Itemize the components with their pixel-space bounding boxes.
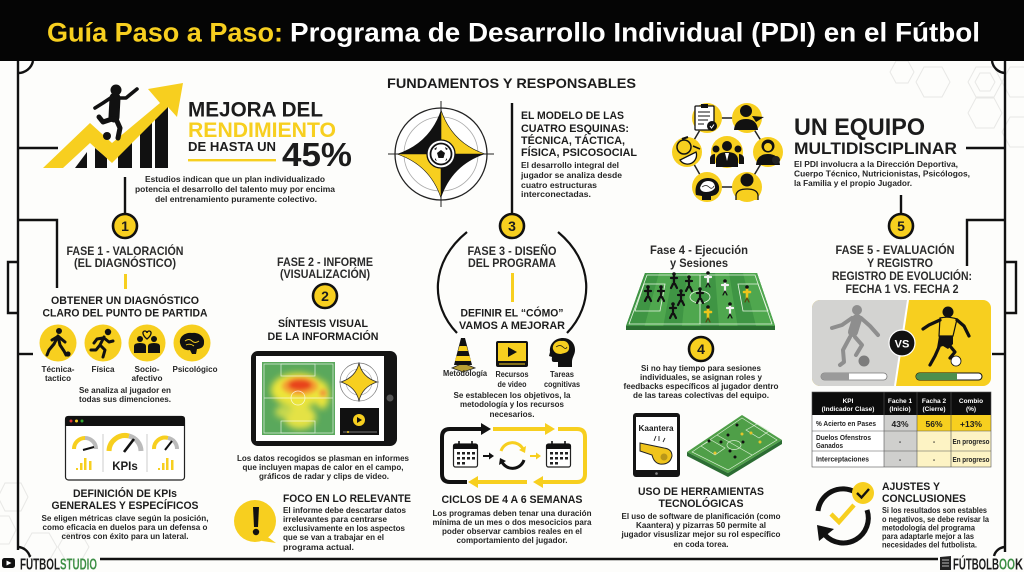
logo: futbol book (940, 554, 1023, 572)
video clip (340, 408, 379, 435)
text: herramientas: en coda torea. (674, 539, 728, 549)
text: roles: individuales, se asignan roles y (640, 372, 762, 382)
heading: ciclos: CICLOS DE 4 A 6 SEMANAS (442, 494, 582, 506)
text: un equipo: Cuerpo Técnico, Nutricionistas, Psicólogos, (794, 168, 970, 178)
icon: head with brain (549, 338, 575, 367)
icon: adjustment cycle (817, 482, 874, 543)
text: foco (283, 505, 406, 552)
icon: tecnica (40, 324, 76, 362)
icon: team network (672, 103, 783, 202)
text: metricas: Se eligen métricas clave según la posición, (42, 513, 208, 523)
table rows: Interceptaciones (816, 456, 869, 464)
text: metricas: como eficacia en duelos para un defensa o (42, 522, 208, 532)
heading: fase 5 (832, 244, 972, 296)
heading: fase 4: y Sesiones (670, 258, 728, 270)
text: un equipo: la Familia y el propio Jugador. (794, 178, 912, 188)
heading: sintesis visual: DE LA INFORMACIÓN (268, 330, 379, 343)
table header (822, 398, 983, 413)
text: datos recogidos: que incluyen mapas de calor en el campo, (242, 462, 404, 472)
icon labels (443, 369, 580, 389)
panel: KPI dashboard: KPIs (112, 461, 138, 473)
badge 2: 2 (321, 288, 329, 304)
icon: growth arrow with player (43, 83, 183, 168)
heading: mejora del rendimiento: MEJORA DEL (188, 98, 323, 122)
badge 4 (689, 337, 713, 361)
table rows: - (933, 457, 936, 464)
heading: modelo: EL MODELO DE LAS (521, 110, 624, 122)
heading: definicion KPIs (52, 487, 198, 512)
text: modelo: El desarrollo integral del (521, 160, 619, 170)
icon: grey player (832, 305, 878, 366)
icon: tablet with heatmap (251, 351, 397, 446)
panel: fase 2 (234, 257, 411, 552)
heading: ajustes: AJUSTES Y (882, 481, 941, 493)
table rows: - (899, 457, 902, 464)
title: Guía Paso a Paso: (47, 18, 283, 48)
heading: herramientas: TECNOLÓGICAS (658, 497, 744, 510)
heading: sintesis visual: SÍNTESIS VISUAL (278, 317, 368, 330)
text: foco: que se van a trabajar en el (283, 532, 384, 542)
table rows: 43% (891, 419, 909, 429)
text: metricas (42, 513, 208, 541)
chart: football pitch with players (626, 271, 775, 330)
table header: Facha 2 (922, 398, 946, 405)
text: modelo: jugador se analiza desde (520, 170, 622, 180)
header banner (0, 0, 1024, 61)
text: ajustes: necesidades del futbolista. (882, 540, 977, 550)
text: objetivos: Se establecen los objetivos, la (454, 390, 571, 400)
diagram: training cycle (442, 423, 585, 488)
heading: fase 4: Fase 4 - Ejecución (650, 245, 748, 257)
panel: fase 1 (40, 177, 218, 541)
logo: futbol studio (2, 554, 97, 572)
text: ajustes: para adaptarle mejor a las (882, 531, 974, 541)
bracket arcs (438, 232, 586, 333)
icon labels: Tareas (550, 370, 575, 379)
icon labels: de video (498, 380, 527, 389)
badge 2 (313, 284, 337, 308)
icon: yellow player (923, 306, 969, 366)
progress bars (821, 373, 982, 380)
table header: (Indicador Clase) (822, 406, 874, 413)
heading: obtener diagnostico (42, 294, 208, 320)
heading: modelo: CUATRO ESQUINAS: (521, 123, 629, 135)
table rows: En progreso (952, 439, 990, 446)
heading: herramientas (638, 486, 764, 510)
text: ajustes (882, 505, 989, 550)
heatmap (262, 362, 335, 435)
text: ciclos: comportamiento del jugador. (456, 535, 568, 545)
icon labels: Metodología (443, 369, 488, 378)
text: foco: programa actual. (283, 542, 354, 552)
heading: mejora del rendimiento: RENDIMIENTO (188, 119, 336, 142)
heading: modelo (521, 110, 637, 159)
text: metricas: centros con éxito para un lateral. (62, 531, 188, 541)
text: modelo: interconectadas. (521, 189, 591, 199)
text: foco: exclusivamente en los aspectos (283, 523, 405, 533)
heading: fase 5: Y REGISTRO (867, 258, 933, 270)
VS badge (889, 330, 915, 356)
badge 1 (113, 177, 137, 238)
radar chart (339, 362, 379, 402)
title: Programa de Desarrollo Individual (PDI) en el Fútbol (290, 18, 980, 48)
heading: mejora del rendimiento: 45% (282, 136, 352, 173)
heading: modelo: TÉCNICA, TÁCTICA, (521, 134, 625, 147)
text: datos recogidos: gráficos de radar y clips de video. (259, 471, 389, 481)
heading: fase 4 (650, 245, 748, 270)
heading: definicion KPIs: GENERALES Y ESPECÍFICOS (52, 499, 198, 512)
table header: Combio (959, 398, 983, 405)
heading: obtener diagnostico: OBTENER UN DIAGNÓSTICO (51, 294, 199, 307)
table header: (%) (966, 406, 976, 413)
heading: fase 3: DEL PROGRAMA (468, 258, 556, 270)
heading: un equipo (794, 114, 957, 158)
heading: definir el como: DEFINIR EL “CÓMO” (460, 306, 564, 320)
text: roles: de las tareas colectivas del equipo. (633, 390, 769, 400)
panel: team (672, 103, 970, 202)
text: datos recogidos (237, 453, 409, 481)
table rows: Ganados (816, 443, 843, 450)
panel: fase 3 (432, 103, 592, 545)
icon: four corners compass (388, 101, 494, 207)
players (645, 275, 750, 322)
icon labels: cognitivas (544, 380, 580, 389)
heading: un equipo: UN EQUIPO (794, 114, 925, 141)
text: ajustes: o negativos, se debe revisar la (882, 514, 989, 524)
table rows: 56% (925, 419, 943, 429)
icon: video (496, 341, 528, 367)
panel: player comparison (812, 300, 991, 386)
icon: psicologico (174, 324, 210, 362)
heading: fase 1: FASE 1 - VALORACIÓN (66, 245, 184, 258)
table: KPI (812, 392, 991, 467)
icon labels: tactico (45, 374, 71, 383)
text: objetivos: necesarios. (490, 409, 534, 419)
text: estudios: potencia el desarrollo del talento muy por encima (135, 184, 335, 194)
icon labels: Psicológico (172, 365, 218, 374)
icon labels: afectivo (132, 374, 163, 383)
heading: fase 3: FASE 3 - DISEÑO (468, 245, 557, 258)
text: ciclos (432, 508, 592, 545)
text: herramientas (621, 511, 780, 549)
heading: mejora del rendimiento: DE HASTA UN (188, 140, 276, 154)
table header: (Inicio) (889, 406, 911, 413)
heading: fase 2: FASE 2 - INFORME (277, 257, 373, 269)
heading: fase 2: (VISUALIZACIÓN) (280, 268, 370, 281)
heading: sintesis visual (268, 317, 379, 343)
text: se analiza: todas sus dimenciones. (79, 394, 171, 404)
text: datos recogidos: Los datos recogidos se plasman en informes (237, 453, 409, 463)
text: ajustes: metodología del programa (882, 522, 975, 532)
icon: tablet with whistle: Kaantera (638, 424, 674, 433)
panel: fase 4 (621, 245, 782, 549)
text: estudios (135, 174, 335, 204)
text: modelo (520, 160, 622, 199)
text: foco: El informe debe descartar datos (283, 505, 406, 515)
table rows: Duelos Ofenstros (816, 435, 871, 442)
text: objetivos: metodología y los recursos (460, 399, 564, 409)
heading: fase 2 (277, 257, 373, 281)
text: estudios: Estudios indican que un plan individualizado (145, 174, 325, 184)
text: un equipo: El PDI involucra a la Dirección Deportiva, (794, 159, 958, 169)
badge 1: 1 (121, 218, 129, 234)
text: ciclos: mínima de un mes o dos mesocicios para (432, 517, 592, 527)
text: herramientas: El uso de software de planificación (como (622, 511, 780, 521)
text: se analiza (79, 385, 171, 404)
icon: isometric tactical board (687, 415, 782, 477)
table rows: - (933, 439, 936, 446)
panel: modelo cuatro esquinas (520, 110, 637, 199)
badge 3 (500, 103, 524, 238)
icon: tablet with whistle (633, 413, 680, 477)
VS badge: VS (895, 338, 909, 350)
text: ciclos: Los programas deben tenar una duración (432, 508, 592, 518)
heading: ajustes (882, 481, 966, 505)
badge 5 (889, 195, 913, 238)
badge 3: 3 (508, 218, 516, 234)
heading: fase 1: (EL DIAGNÓSTICO) (74, 257, 176, 270)
text: estudios: del entrenamiento puramente colectivo. (155, 194, 317, 204)
table rows: +13% (960, 419, 982, 429)
heading: herramientas: USO DE HERRAMIENTAS (638, 486, 764, 498)
heading: definir el como (459, 306, 565, 332)
text: modelo: cuatro estructuras (521, 180, 597, 190)
icon labels: Física (92, 365, 115, 374)
heading: ajustes: CONCLUSIONES (882, 493, 966, 505)
table rows: - (899, 439, 902, 446)
icon labels: Socio- (134, 365, 160, 374)
icon labels (42, 365, 218, 383)
text: herramientas: Kaantera) y pizarras 50 permite al (636, 520, 766, 530)
heading: foco: FOCO EN LO RELEVANTE (283, 493, 411, 505)
panel: fase 5 (812, 195, 991, 550)
badge 5: 5 (897, 218, 905, 234)
table header: (Cierre) (922, 406, 946, 413)
text: un equipo (794, 159, 970, 188)
text: se analiza: Se analiza al jugador en (79, 385, 171, 395)
heading: fase 5: FECHA 1 VS. FECHA 2 (846, 284, 958, 296)
heading: definir el como: VAMOS A MEJORAR (459, 320, 565, 332)
text: objetivos (454, 390, 571, 419)
heading: fase 5: REGISTRO DE EVOLUCIÓN: (832, 270, 972, 283)
heading: mejora del rendimiento (188, 98, 352, 173)
text: roles: Si no hay tiempo para sesiones (641, 363, 761, 373)
table header: KPI (843, 398, 854, 405)
heading: fundamentos: FUNDAMENTOS Y RESPONSABLES (387, 75, 636, 91)
heading: definicion KPIs: DEFINICIÓN DE KPIs (73, 487, 177, 500)
text: roles (624, 363, 778, 400)
text: ciclos: poder observar cambios reales en el (442, 526, 582, 536)
icon labels: Recursos (496, 370, 529, 379)
icon: cone (452, 338, 475, 372)
icon labels: Técnica- (42, 365, 75, 374)
table header: Fache 1 (888, 398, 912, 405)
panel: mejora del rendimiento (43, 83, 352, 204)
heading: fase 5: FASE 5 - EVALUACIÓN (836, 244, 954, 257)
text: foco: irrelevantes para centrarse (283, 514, 387, 524)
table rows: % Acierto en Pases (816, 421, 876, 428)
text: ajustes: Si los resultados son estables (882, 505, 987, 515)
text: roles: feedbacks específicos al jugador dentro (624, 381, 778, 391)
heading: modelo: FÍSICA, PSICOSOCIAL (521, 146, 637, 159)
badge 4: 4 (697, 341, 705, 357)
table rows (816, 419, 990, 464)
icon: socio-afectivo (128, 324, 166, 362)
heading: un equipo: MULTIDISCIPLINAR (794, 139, 957, 158)
icon: fisica (84, 324, 122, 362)
heading: fase 3 (468, 245, 557, 270)
panel: KPI dashboard (65, 416, 185, 480)
icon: exclamation bubble (234, 500, 276, 543)
text: herramientas: jugador visuslizar mejor su rol específico (621, 529, 780, 539)
heading: fase 1 (66, 245, 184, 270)
table rows: En progreso (952, 457, 990, 464)
heading: obtener diagnostico: CLARO DEL PUNTO DE PARTIDA (42, 308, 208, 320)
